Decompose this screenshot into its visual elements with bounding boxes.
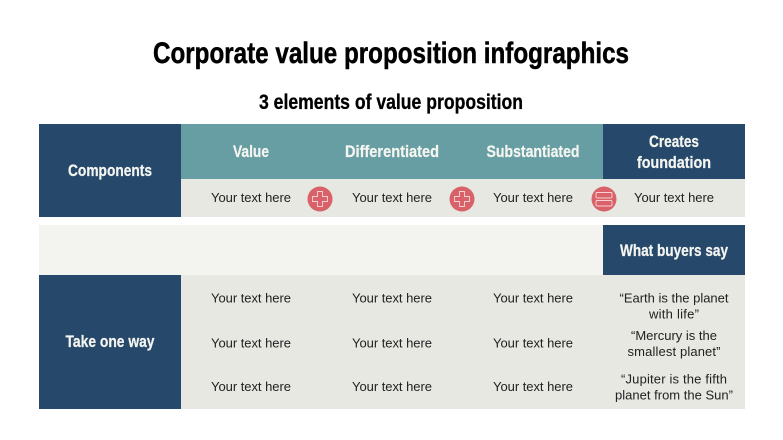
row 1: Your text here xyxy=(493,290,573,306)
header band: element names: Value xyxy=(233,142,269,161)
what buyers say heading cell: What buyers say xyxy=(620,241,728,260)
rows background xyxy=(181,275,745,409)
spacer band xyxy=(39,225,603,275)
panel: components table xyxy=(39,124,745,217)
title: Corporate value proposition infographics xyxy=(153,37,629,70)
creates foundation heading cell: foundation xyxy=(637,153,711,172)
creates foundation heading cell: Creates xyxy=(649,132,699,151)
header band: element names: Differentiated xyxy=(345,142,439,161)
text row xyxy=(181,179,745,217)
components heading cell xyxy=(39,124,181,217)
row 3 xyxy=(211,372,733,402)
row 3: “Jupiter is the fifth xyxy=(621,372,727,386)
row 1: Your text here xyxy=(211,290,291,306)
text row: Your text here xyxy=(634,190,714,205)
row 2: “Mercury is the xyxy=(631,328,717,343)
text row: Your text here xyxy=(493,190,573,205)
take one way heading cell: Take one way xyxy=(66,332,155,351)
row 1 xyxy=(211,290,729,322)
subtitle: 3 elements of value proposition xyxy=(259,91,523,114)
row 2: Your text here xyxy=(211,336,291,350)
row 1: “Earth is the planet xyxy=(620,290,729,306)
row 3: Your text here xyxy=(211,379,291,394)
text row: Your text here xyxy=(211,190,291,205)
row 2 xyxy=(211,328,720,359)
row 2: Your text here xyxy=(493,336,573,350)
components heading cell: Components xyxy=(68,161,152,180)
row 2: Your text here xyxy=(352,336,432,350)
creates foundation heading cell xyxy=(603,124,745,179)
icon: plus xyxy=(308,186,332,212)
row 2: smallest planet” xyxy=(628,344,720,359)
panel: take one way table xyxy=(39,225,745,409)
take one way heading cell xyxy=(39,275,181,409)
row 1: Your text here xyxy=(352,290,432,306)
text row: Your text here xyxy=(352,190,432,205)
header band: element names: Substantiated xyxy=(486,142,580,161)
row 3: Your text here xyxy=(352,379,432,394)
row 3: planet from the Sun” xyxy=(615,388,733,402)
what buyers say heading cell xyxy=(603,225,745,275)
header band: element names xyxy=(181,124,603,179)
icon: plus xyxy=(450,186,474,212)
icon: equals xyxy=(592,186,616,212)
row 1: with life” xyxy=(648,306,699,322)
row 3: Your text here xyxy=(493,379,573,394)
